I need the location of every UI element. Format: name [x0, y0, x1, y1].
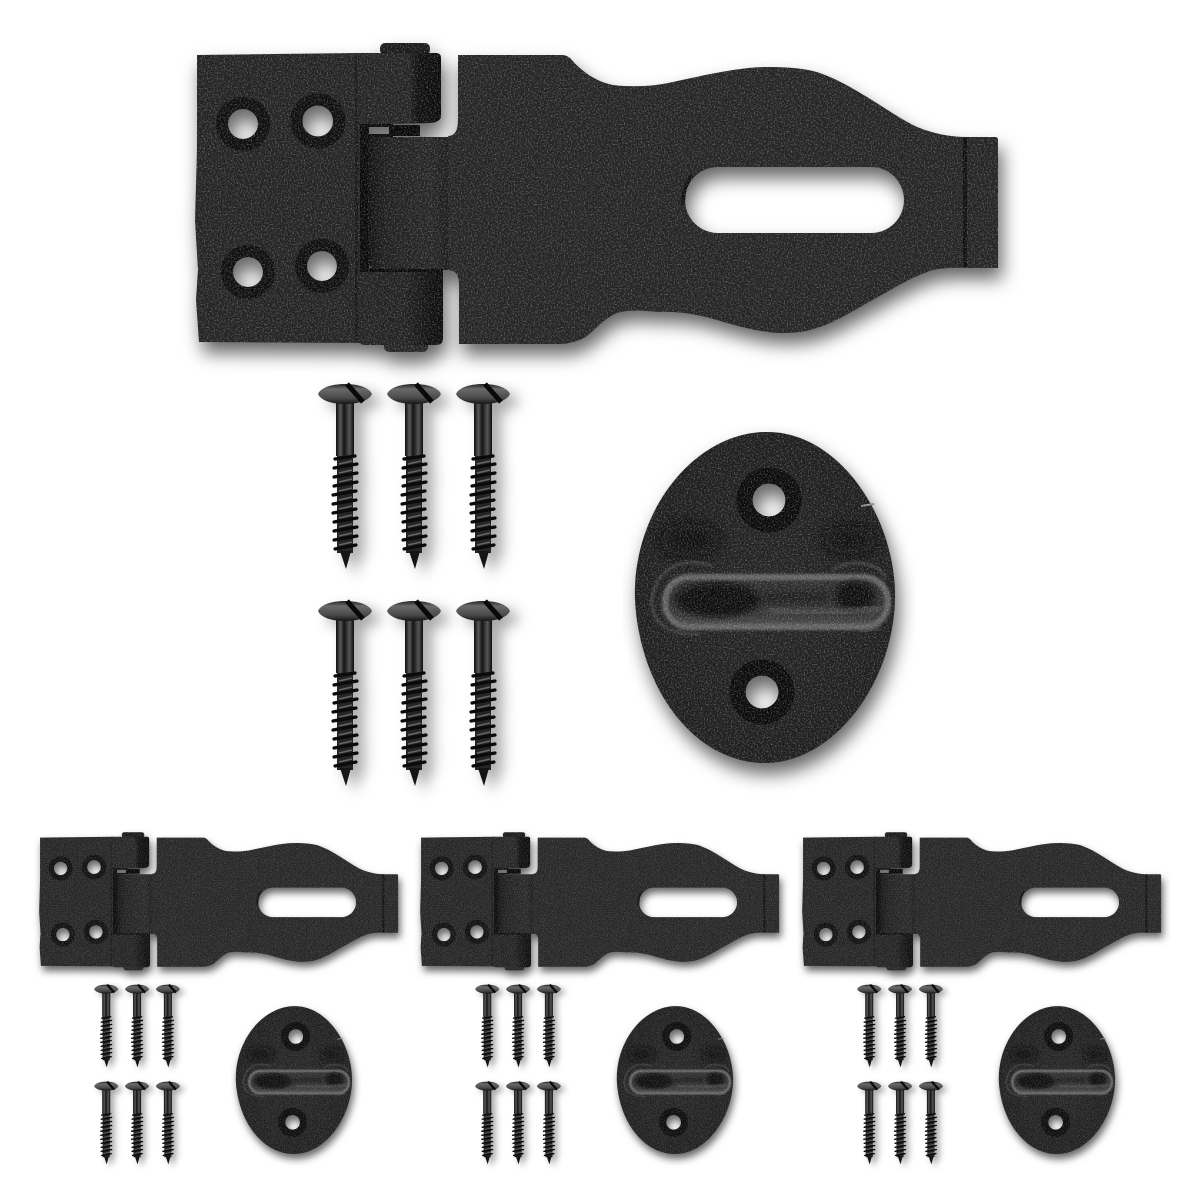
small kit 1: [39, 832, 398, 1164]
small kit 2: [420, 832, 779, 1164]
small kit 3: [802, 832, 1161, 1164]
large kit: hasp, staple and six screws: [195, 43, 998, 786]
